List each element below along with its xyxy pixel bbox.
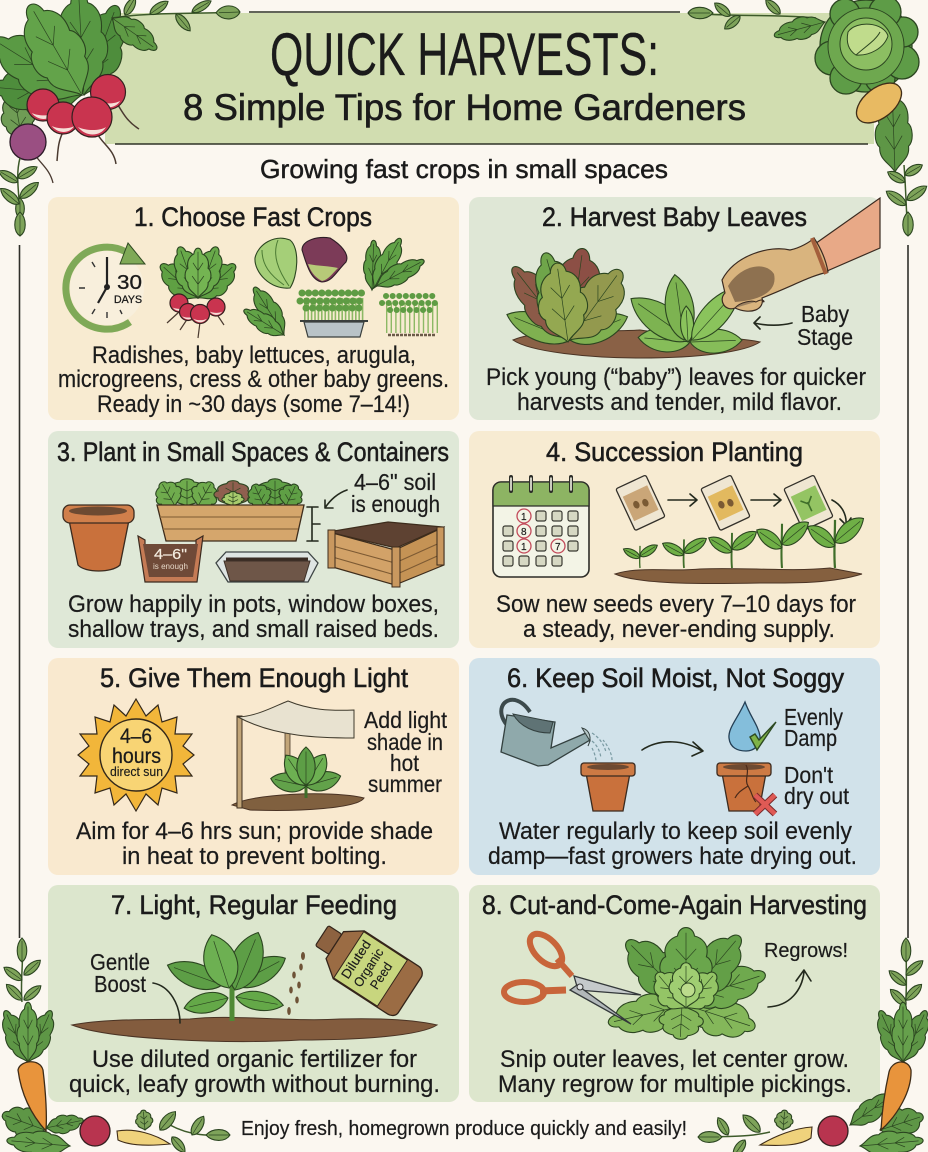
illustration: small pot with label: 4–6" — [154, 546, 187, 563]
body text 4: a steady, never-ending supply. — [523, 616, 835, 643]
icon: calendar: 8 — [521, 527, 527, 538]
icon: calendar: 7 — [555, 542, 561, 553]
dimension bracket — [307, 507, 320, 541]
body text 7: Use diluted organic fertilizer for — [92, 1046, 417, 1073]
soil bed — [72, 1017, 437, 1041]
days label: DAYS — [114, 294, 142, 306]
label: add light shade: hot — [390, 750, 420, 776]
heading 8: 8. Cut-and-Come-Again Harvesting — [482, 890, 867, 920]
icon: arugula — [363, 234, 429, 295]
illustration: plant — [163, 927, 291, 1021]
body text 2: harvests and tender, mild flavor. — [517, 389, 842, 416]
panel: 4 succession planting — [469, 431, 880, 648]
heading 2: 2. Harvest Baby Leaves — [542, 202, 807, 232]
carrot — [881, 1062, 911, 1130]
body text 3: Grow happily in pots, window boxes, — [68, 591, 439, 618]
arrow — [325, 490, 347, 508]
icon: calendar: 1 — [521, 542, 527, 553]
icon: scissors — [504, 928, 641, 1024]
icon: fertilizer drops — [287, 952, 305, 1015]
icon: watering can — [501, 700, 612, 766]
panel: 6 soil moisture — [469, 658, 880, 875]
body text 3: shallow trays, and small raised beds. — [68, 616, 439, 643]
icon: calendar: 1 — [521, 512, 527, 523]
icon: fertilizer bottle: Peed — [367, 960, 395, 992]
label: add light shade: shade in — [367, 729, 443, 755]
footer text: Enjoy fresh, homegrown produce quickly and easily! — [241, 1118, 687, 1140]
illustration: cut-and-come-again lettuce — [604, 922, 771, 1047]
label: soil depth: 4–6" soil — [354, 469, 436, 495]
label: soil depth — [325, 469, 440, 517]
panel: 2 harvest baby leaves — [469, 197, 880, 420]
illustration: terracotta pot — [63, 505, 134, 571]
label: regrows: Regrows! — [764, 940, 848, 962]
label: evenly damp: Evenly — [784, 704, 843, 730]
heading 1: 1. Choose Fast Crops — [134, 202, 372, 232]
icon: sprouts — [382, 296, 440, 335]
icon: fertilizer bottle — [306, 913, 426, 1018]
icon: sun: direct sun — [110, 764, 163, 779]
icon: sun: hours — [112, 745, 161, 768]
body text 2: Pick young (“baby”) leaves for quicker — [486, 364, 866, 391]
heading 5: 5. Give Them Enough Light — [100, 663, 408, 693]
pointer — [153, 983, 180, 1023]
corner art: bottom-right vegetables — [698, 938, 928, 1152]
soil mound — [513, 330, 760, 358]
body text 8: Many regrow for multiple pickings. — [498, 1071, 852, 1098]
illustration: seedling row — [615, 511, 867, 584]
icon: red lettuce — [302, 238, 347, 282]
beet — [10, 124, 53, 183]
carrot — [18, 1062, 46, 1131]
sun label: 4–6 — [120, 725, 152, 748]
icon: watered pot — [581, 763, 635, 811]
body text 1: Ready in ~30 days (some 7–14!) — [97, 391, 410, 418]
parsnip — [760, 1127, 812, 1145]
subtitle: 8 Simple Tips for Home Gardeners — [183, 87, 746, 128]
illustration: baby plant — [623, 273, 750, 354]
label: gentle boost — [90, 949, 180, 1023]
panel: 3 small spaces — [48, 431, 459, 648]
icon: water drop with check — [729, 702, 776, 751]
heading 3: 3. Plant in Small Spaces & Containers — [57, 437, 449, 467]
icon: green lettuce — [255, 238, 297, 288]
panel: 8 cut and come again — [469, 885, 880, 1102]
illustration: shade cloth and plant — [232, 701, 364, 810]
label: soil depth: is enough — [351, 491, 440, 517]
body text 6 — [488, 818, 857, 870]
vine — [0, 158, 41, 236]
body text 4 — [496, 591, 856, 643]
label: evenly damp — [784, 704, 843, 751]
water drops — [592, 733, 612, 762]
body text 1: microgreens, cress & other baby greens. — [58, 366, 449, 393]
label: baby stage: Stage — [797, 324, 853, 350]
title: QUICK HARVESTS: — [270, 21, 659, 88]
side border lines — [20, 245, 908, 938]
illustration: small pot with label: is enough — [153, 562, 188, 571]
label: add light shade: summer — [368, 771, 442, 797]
cabbage — [815, 0, 919, 94]
potato — [849, 75, 909, 131]
body text 5: in heat to prevent bolting. — [122, 843, 387, 870]
icon: fertilizer bottle: Organic — [350, 945, 387, 990]
body text 8: Snip outer leaves, let center grow. — [500, 1046, 849, 1073]
body text 4: Sow new seeds every 7–10 days for — [496, 591, 856, 618]
label: gentle boost: Boost — [94, 971, 147, 997]
body text 5 — [76, 818, 433, 870]
body text 2 — [486, 364, 866, 416]
body text 5: Aim for 4–6 hrs sun; provide shade — [76, 818, 433, 845]
body text 1 — [58, 342, 449, 418]
label: dont dry out: dry out — [784, 783, 850, 809]
icon: arugula lower — [239, 282, 293, 343]
radish — [80, 1116, 110, 1146]
corner art: top-left radishes — [0, 0, 240, 236]
header banner — [105, 12, 874, 144]
arrow: regrows — [768, 970, 811, 1007]
parsnip — [117, 1130, 170, 1145]
illustration: raised bed — [328, 522, 444, 587]
body text 8 — [498, 1046, 852, 1098]
label: dont dry out: Don't — [784, 762, 834, 788]
illustration: window box — [149, 476, 307, 541]
body text 7: quick, leafy growth without burning. — [69, 1071, 440, 1098]
icon: seed packets — [616, 475, 833, 531]
icon: dry cracked pot — [717, 763, 775, 814]
label: dont dry out — [784, 762, 850, 809]
illustration: gloved hand — [722, 198, 880, 311]
panel: 5 enough light — [48, 658, 459, 875]
label: baby stage — [754, 301, 853, 350]
illustration: mature lettuce — [499, 245, 640, 354]
panel: 1 choose fast crops — [48, 197, 459, 420]
panel: 7 feeding — [48, 885, 459, 1102]
label: gentle boost: Gentle — [90, 949, 150, 975]
tagline: Growing fast crops in small spaces — [260, 154, 668, 184]
label: evenly damp: Damp — [784, 725, 837, 751]
radish — [818, 1116, 848, 1146]
label: add light shade: Add light — [364, 707, 448, 733]
clock label: 30 — [117, 272, 142, 294]
heading 6: 6. Keep Soil Moist, Not Soggy — [507, 663, 844, 693]
body text 6: damp—fast growers hate drying out. — [488, 843, 857, 870]
icon: 30 day clock — [66, 243, 145, 329]
heading 7: 7. Light, Regular Feeding — [111, 890, 397, 920]
arrows between packets — [668, 494, 851, 525]
icon: microgreens tray — [300, 293, 368, 337]
heading 4: 4. Succession Planting — [546, 437, 803, 467]
label: baby stage: Baby — [801, 301, 849, 327]
corner art: bottom-left vegetables — [0, 938, 230, 1152]
body text 6: Water regularly to keep soil evenly — [499, 818, 852, 845]
icon: radish bunch — [152, 242, 244, 338]
red cross — [755, 795, 775, 814]
body text 1: Radishes, baby lettuces, arugula, — [92, 342, 416, 369]
arrow — [754, 317, 792, 329]
arrow — [642, 742, 703, 756]
icon: calendar — [493, 477, 589, 577]
corner art: top-right cabbage — [688, 0, 928, 236]
body text 3 — [68, 591, 439, 643]
icon: sun — [78, 699, 194, 811]
illustration: small pot with label — [138, 536, 203, 582]
bottle label: Diluted — [338, 937, 374, 982]
illustration: shallow tray — [216, 552, 318, 582]
body text 7 — [69, 1046, 440, 1098]
label: add light shade — [364, 707, 448, 797]
